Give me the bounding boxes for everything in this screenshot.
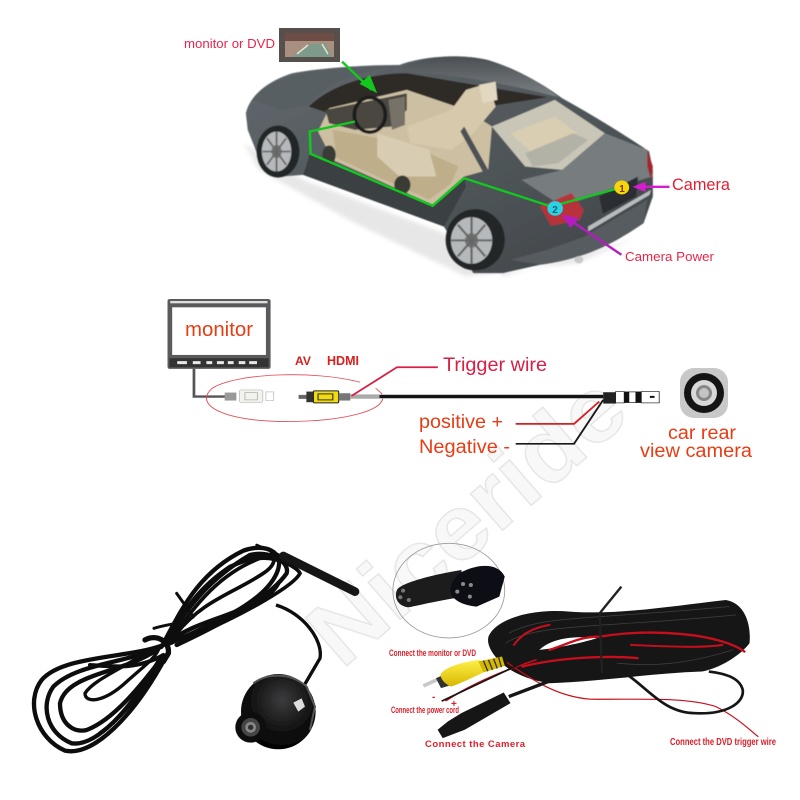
front seats: [407, 83, 496, 150]
wiring drawing: [168, 299, 659, 444]
label: HDMI: HDMI: [327, 354, 359, 368]
label: positive +: positive +: [419, 411, 503, 433]
dense bundle mass: [488, 600, 750, 683]
yellow RCA plug: [299, 391, 350, 403]
negative wire: [516, 400, 603, 444]
monitor cable: [194, 369, 226, 397]
plug connector: [283, 556, 355, 592]
plug pins: [455, 582, 473, 599]
label: monitor or DVD: monitor or DVD: [184, 36, 275, 51]
inset outline: [393, 543, 505, 638]
car body: [246, 56, 653, 273]
cable bundle: [423, 587, 758, 738]
male plug head: [450, 566, 505, 607]
label: minus: -: [432, 692, 435, 703]
icon: monitor or DVD thumbnail: [279, 28, 340, 62]
camera bright notch: [293, 698, 305, 712]
monitor icon: [168, 299, 271, 369]
marker 2: [547, 201, 563, 216]
coiled black cable: [34, 545, 300, 751]
label: Connect the Camera: Connect the Camera: [425, 739, 526, 750]
label: Trigger wire: Trigger wire: [443, 354, 547, 376]
label: Connect the monitor or DVD: Connect the monitor or DVD: [389, 648, 476, 658]
marker 1: [614, 180, 629, 194]
camera lens: [235, 712, 266, 743]
panel: extension cable photo: [389, 543, 776, 750]
watermark: Niceride: [288, 356, 646, 685]
label: Connect the power cord: Connect the power cord: [391, 705, 459, 715]
marker number 1: 1: [619, 184, 625, 195]
licence plate: [599, 176, 638, 214]
label: Negative -: Negative -: [419, 436, 510, 458]
icon: rear camera: [680, 368, 728, 418]
camera lead: [276, 605, 320, 684]
panel: camera kit photo: [34, 545, 355, 751]
rear trunk lid: [522, 133, 653, 206]
magenta arrow: camera: [632, 182, 670, 192]
B pillar and door frame: [460, 127, 488, 172]
label: monitor: monitor: [185, 319, 253, 341]
panel: car installation diagram: [184, 28, 731, 276]
black wire end: [442, 657, 536, 701]
rear window interior: [492, 100, 605, 170]
car ground shadow: [244, 143, 632, 276]
illustration: cutaway car: [244, 56, 670, 276]
female plug holes: [398, 589, 411, 602]
camera plug: [438, 693, 511, 738]
camera plug lead: [509, 680, 553, 697]
hood: [252, 66, 392, 110]
red coil wires: [446, 625, 758, 736]
label: car rear: car rear: [668, 422, 736, 444]
camera ring highlights: [253, 676, 315, 730]
rear wheel: [446, 209, 505, 270]
windshield and dash: [309, 73, 547, 113]
black coil highlights: [505, 607, 736, 665]
front wheel: [257, 126, 300, 177]
green arrow to monitor: [342, 62, 377, 93]
white connector: [225, 390, 274, 403]
marker number 2: 2: [552, 205, 558, 216]
positive wire: [516, 402, 599, 424]
door speakers: [322, 146, 336, 164]
cable tie: [600, 587, 621, 673]
RCA yellow plug: [423, 657, 505, 688]
rear lower bumper: [510, 200, 647, 265]
roof: [401, 56, 558, 97]
panel: wiring diagram: [168, 299, 752, 462]
trigger wire line: [352, 367, 438, 396]
highlight ellipse: [206, 375, 383, 422]
label: Camera: Camera: [672, 176, 731, 194]
camera connector: [603, 392, 659, 404]
black trigger loop: [614, 668, 743, 713]
female plug: [396, 570, 465, 607]
tail light: [540, 193, 584, 226]
label: Camera Power: Camera Power: [625, 249, 715, 264]
exhaust: [574, 256, 583, 263]
cabin interior: [318, 90, 492, 205]
main cable core: [380, 392, 603, 401]
dashboard and steering wheel: [325, 93, 407, 130]
inset connector circle: [393, 543, 505, 638]
label: AV: AV: [295, 356, 311, 368]
dark sill: [303, 154, 466, 226]
magenta arrow: camera power: [561, 215, 621, 255]
camera ball: [241, 674, 316, 749]
main cable: [350, 390, 603, 403]
label: plus: +: [451, 699, 457, 710]
green cable route: [310, 122, 621, 206]
label: view camera: view camera: [640, 440, 752, 462]
